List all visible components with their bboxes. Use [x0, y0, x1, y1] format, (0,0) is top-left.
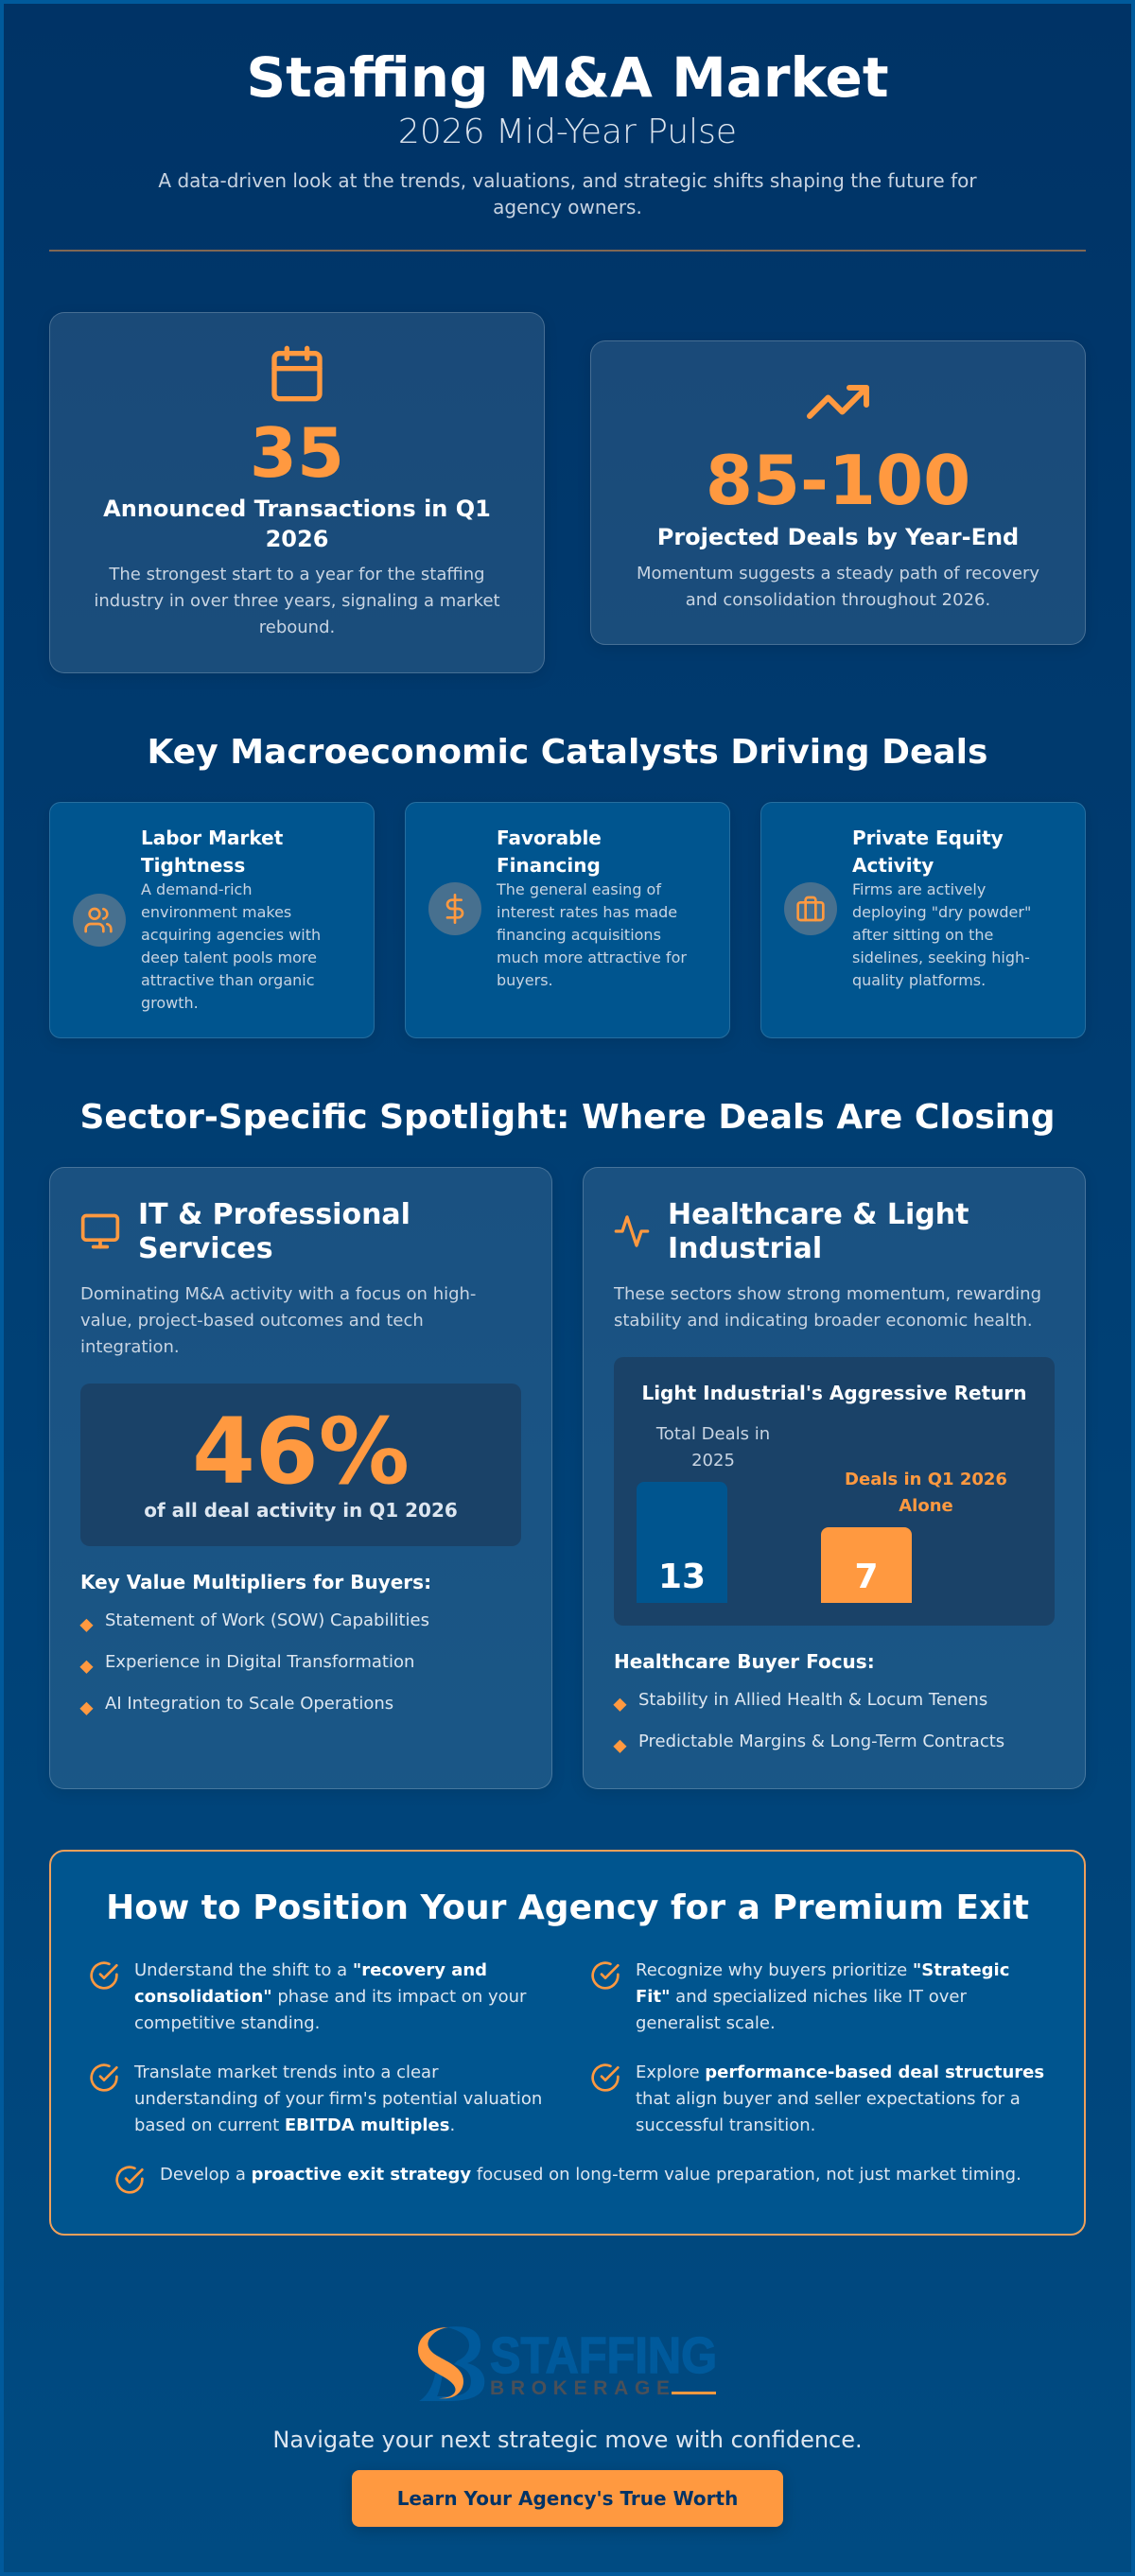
icon: check	[590, 2063, 620, 2093]
tagline: Navigate your next strategic move with confidence.	[272, 2427, 863, 2453]
stat description	[94, 565, 500, 637]
panel description: These sectors show strong momentum, rewarding	[614, 1284, 1041, 1304]
stat description: industry in over three years, signaling a market	[94, 591, 500, 611]
panel: IT and professional services	[49, 1167, 552, 1789]
catalyst text	[141, 827, 321, 1012]
icon: check	[90, 1961, 118, 1990]
stat: 85-100: 85-100	[706, 441, 970, 520]
button: call to action	[352, 2470, 783, 2527]
panel: projected deals	[590, 340, 1086, 645]
panel: healthcare and light industrial	[583, 1167, 1086, 1789]
item text: that align buyer and seller expectations for a	[636, 2089, 1021, 2109]
stat label: Projected Deals by Year-End	[657, 524, 1019, 550]
catalyst text	[852, 827, 1031, 989]
catalyst title: Favorable	[497, 827, 602, 849]
panel heading: Industrial	[668, 1232, 822, 1265]
bar value: 13	[658, 1558, 706, 1596]
catalyst description	[496, 880, 687, 989]
bar label Q1 2026: Alone	[899, 1496, 953, 1516]
catalyst description: environment makes	[141, 903, 291, 921]
catalyst description: The general easing of	[497, 880, 661, 898]
list heading: Healthcare Buyer Focus:	[614, 1650, 875, 1673]
catalyst description: acquiring agencies with	[141, 926, 321, 944]
item text: successful transition.	[636, 2115, 815, 2135]
item 2	[591, 1960, 1009, 2033]
wordmark: brokerage: BROKERAGE	[490, 2377, 670, 2399]
item 4	[591, 2063, 1044, 2135]
stat label	[103, 496, 491, 552]
chart title: Light Industrial's Aggressive Return	[641, 1382, 1027, 1404]
catalyst title	[852, 827, 1004, 877]
catalyst title	[497, 827, 602, 877]
catalyst description: sidelines, seeking high-	[852, 949, 1030, 966]
bullet 2: Predictable Margins & Long-Term Contracts	[638, 1732, 1004, 1751]
catalyst description: Firms are actively	[852, 880, 986, 898]
item text	[134, 2063, 542, 2135]
item 1	[90, 1960, 526, 2033]
panel: announced transactions	[49, 312, 545, 673]
panel heading: Healthcare & Light	[668, 1198, 969, 1231]
item text	[636, 2060, 1044, 2139]
panel description: stability and indicating broader economic health.	[614, 1311, 1033, 1331]
panel: premium exit	[49, 1850, 1086, 2236]
stat label: Announced Transactions in Q1	[103, 496, 491, 522]
stat description: Momentum suggests a steady path of recovery	[637, 564, 1039, 583]
stat box: 46 percent	[80, 1384, 521, 1546]
catalyst description: growth.	[141, 994, 199, 1012]
heading: sector spotlight: Sector-Specific Spotlight: Where Deals Are Closing	[79, 1098, 1056, 1137]
panel: favorable financing	[405, 802, 730, 1038]
heading: catalysts: Key Macroeconomic Catalysts Driving Deals	[148, 733, 987, 772]
intro text	[158, 169, 977, 218]
bullet 2: Experience in Digital Transformation	[105, 1652, 414, 1672]
intro text: A data-driven look at the trends, valuations, and strategic shifts shaping the future for	[158, 169, 977, 192]
icon: monitor	[81, 1214, 119, 1248]
catalyst description: interest rates has made	[497, 903, 677, 921]
list heading: Key Value Multipliers for Buyers:	[80, 1571, 431, 1593]
panel heading	[668, 1198, 969, 1265]
bullet 1: Stability in Allied Health & Locum Tenens	[638, 1690, 987, 1710]
subtitle: 2026 Mid-Year Pulse	[398, 113, 737, 151]
stat description: rebound.	[259, 618, 335, 637]
catalyst description: A demand-rich	[141, 880, 252, 898]
catalyst title: Private Equity	[852, 827, 1004, 849]
title: Staffing M&A Market	[246, 45, 889, 110]
icon: briefcase	[784, 882, 837, 935]
item text: Understand the shift to a "recovery and	[134, 1960, 487, 1980]
catalyst description	[852, 880, 1031, 989]
panel description: integration.	[80, 1337, 180, 1357]
item text: competitive standing.	[134, 2013, 320, 2033]
stat: 35: 35	[250, 413, 344, 493]
healthcare focus list	[613, 1690, 1004, 1753]
icon: check	[114, 2165, 145, 2195]
bullet 1: Statement of Work (SOW) Capabilities	[105, 1610, 429, 1630]
item text: consolidation" phase and its impact on your	[134, 1987, 526, 2007]
bar label 2025	[656, 1424, 770, 1471]
bullet 3: AI Integration to Scale Operations	[105, 1694, 393, 1714]
catalyst text	[496, 827, 687, 989]
stat value: 46%	[192, 1399, 410, 1505]
catalyst description: attractive than organic	[141, 971, 315, 989]
stat label: 2026	[266, 526, 328, 552]
catalyst title: Tightness	[141, 854, 245, 877]
stat caption: of all deal activity in Q1 2026	[144, 1499, 458, 1522]
item text: Fit" and specialized niches like IT over	[636, 1987, 967, 2007]
panel heading	[138, 1198, 410, 1265]
item text: understanding of your firm's potential valuation	[134, 2089, 542, 2109]
icon: activity	[615, 1215, 649, 1247]
catalyst title	[141, 827, 283, 877]
bar label Q1 2026: Deals in Q1 2026	[845, 1470, 1007, 1489]
panel heading: IT & Professional	[138, 1198, 410, 1231]
icon: dollar	[428, 882, 481, 935]
bar label Q1 2026	[845, 1470, 1007, 1516]
bar: 13 deals	[637, 1482, 727, 1603]
item text: Develop a proactive exit strategy focused on long-term value preparation, not just market timing.	[160, 2165, 1022, 2184]
item text: Recognize why buyers prioritize "Strategic	[636, 1960, 1009, 1980]
catalyst description: quality platforms.	[852, 971, 986, 989]
panel heading: How to Position Your Agency for a Premium Exit	[106, 1888, 1029, 1927]
icon: trending up	[807, 385, 869, 419]
panel description: Dominating M&A activity with a focus on high-	[80, 1284, 476, 1304]
logo: Staffing Brokerage	[407, 2317, 728, 2411]
bar value: 7	[854, 1558, 879, 1596]
catalyst description: after sitting on the	[852, 926, 993, 944]
bar: 7 deals	[821, 1527, 912, 1603]
icon: users	[73, 894, 126, 947]
panel description	[613, 1284, 1041, 1331]
icon: check	[90, 2063, 118, 2092]
panel description: value, project-based outcomes and tech	[80, 1311, 424, 1331]
value multiplier list	[79, 1610, 429, 1715]
panel heading: Services	[138, 1232, 273, 1265]
item 3	[90, 2063, 542, 2135]
catalyst description: deep talent pools more	[141, 949, 317, 966]
icon: calendar	[271, 346, 323, 401]
item 5	[114, 2162, 1022, 2200]
catalyst description: buyers.	[497, 971, 553, 989]
catalyst description: much more attractive for	[497, 949, 687, 966]
catalyst title: Labor Market	[141, 827, 283, 849]
intro text: agency owners.	[493, 196, 642, 218]
item text: based on current EBITDA multiples.	[134, 2115, 455, 2135]
panel: private equity	[760, 802, 1086, 1038]
button: call to action: Learn Your Agency's True Worth	[397, 2487, 738, 2510]
icon: check	[591, 1961, 620, 1990]
catalyst description: financing acquisitions	[497, 926, 661, 944]
stat description: The strongest start to a year for the staffing	[109, 565, 485, 584]
item text: generalist scale.	[636, 2013, 776, 2033]
item text	[134, 1960, 526, 2033]
item text: Translate market trends into a clear	[134, 2063, 438, 2082]
item text: Explore performance-based deal structures	[636, 2063, 1044, 2082]
catalyst title: Activity	[852, 854, 934, 877]
catalyst description	[141, 880, 321, 1012]
stat description: and consolidation throughout 2026.	[686, 590, 990, 610]
catalyst title: Financing	[497, 854, 601, 877]
item text	[636, 1960, 1009, 2033]
bar chart: light industrial	[614, 1357, 1055, 1626]
catalyst description: deploying "dry powder"	[852, 903, 1031, 921]
panel description	[80, 1284, 476, 1357]
bar label 2025: Total Deals in	[656, 1424, 770, 1444]
bar label 2025: 2025	[691, 1451, 735, 1471]
panel: labor market	[49, 802, 375, 1038]
stat description	[637, 564, 1039, 610]
